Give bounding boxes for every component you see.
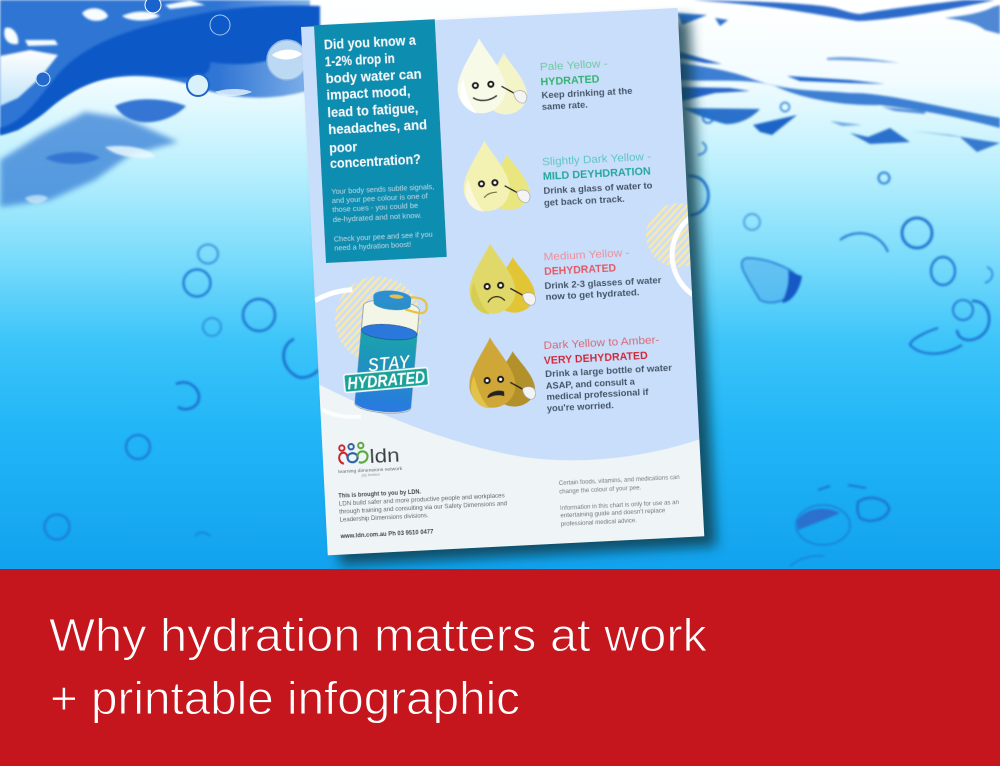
title text: + printable infographic	[50, 672, 520, 724]
heading: poor	[329, 138, 358, 156]
footer text: disclaimer: professional medical advice.	[561, 518, 637, 528]
row: slightly dark yellow: Drink a glass of water to	[543, 181, 653, 197]
footer background	[319, 365, 704, 555]
row: medium yellow: Drink 2-3 glasses of water	[544, 275, 662, 292]
paper	[301, 8, 704, 556]
row: pale yellow hydrated: same rate.	[542, 100, 588, 113]
sheet shadow	[313, 18, 716, 565]
row: pale yellow hydrated: Pale Yellow -	[540, 58, 608, 74]
row: dark yellow to amber: medical professional if	[546, 387, 649, 403]
row: medium yellow: Medium Yellow -	[543, 247, 630, 264]
title text: Why hydration matters at work	[49, 609, 708, 661]
bubbles	[44, 102, 992, 566]
row: slightly dark yellow: Slightly Dark Yellow -	[542, 151, 652, 169]
footer text: disclaimer: Information in this chart is only for use as an	[560, 500, 679, 512]
heading: lead to fatigue,	[327, 100, 419, 120]
footer text: about ldn: Leadership Dimensions divisions.	[340, 513, 429, 524]
bottle illustration	[338, 287, 437, 417]
row: medium yellow: DEHYDRATED	[544, 262, 616, 278]
body text: Your body sends subtle signals,	[331, 182, 434, 196]
label: stay hydrated	[342, 350, 429, 394]
row: slightly dark yellow	[461, 132, 654, 213]
footer text: about ldn: www.ldn.com.au Ph 03 9510 0477	[339, 530, 434, 540]
body text: de-hydrated and not know.	[333, 210, 422, 224]
decoration: white arc bottom	[320, 406, 361, 419]
footer text: about ldn: through training and consulting via our Safety Dimensions and	[339, 501, 507, 516]
row: medium yellow	[467, 235, 663, 315]
footer text: about ldn	[337, 485, 509, 540]
heading: body water can	[325, 65, 422, 86]
label: stay hydrated: STAY	[367, 352, 413, 377]
row: dark yellow to amber: Dark Yellow to Amber-	[543, 334, 660, 352]
icon: happy drops	[455, 36, 528, 117]
body text: and your pee colour is one of	[332, 191, 429, 205]
heading: 1-2% drop in	[324, 50, 395, 69]
footer text: disclaimer: Certain foods, vitamins, and medications can	[559, 475, 680, 487]
row: pale yellow hydrated	[455, 31, 633, 117]
footer text: disclaimer: entertaining guide and doesn't replace	[560, 508, 666, 520]
bottle handle	[405, 297, 427, 314]
heading: impact mood,	[326, 83, 411, 103]
title text	[49, 609, 708, 724]
logo: ldn: pty limited	[361, 472, 380, 477]
footer text: about ldn: This is brought to you by LDN.	[338, 490, 422, 500]
row: pale yellow hydrated: Keep drinking at the	[541, 86, 633, 101]
row: pale yellow hydrated: HYDRATED	[540, 74, 600, 89]
row: medium yellow: now to get hydrated.	[545, 287, 640, 303]
bottle liquid	[354, 330, 417, 414]
body text: Check your pee and see if you	[334, 230, 433, 244]
decoration: white arc top	[314, 290, 353, 301]
logo: ldn: ldn	[369, 445, 400, 468]
row: dark yellow to amber: VERY DEHYDRATED	[544, 350, 648, 367]
infographic sheet	[301, 8, 725, 569]
footer text: about ldn: LDN build safer and more productive people and workplaces	[339, 493, 505, 507]
icon: worried drops	[467, 335, 536, 409]
row: dark yellow to amber: you're worried.	[547, 400, 614, 415]
decoration: white ring right	[670, 216, 692, 297]
row: slightly dark yellow: get back on track.	[544, 194, 625, 209]
row: dark yellow to amber	[467, 328, 674, 419]
bottle body	[354, 298, 420, 415]
body text: need a hydration boost!	[334, 240, 411, 253]
title banner	[0, 569, 1000, 766]
row: dark yellow to amber: Drink a large bottle of water	[545, 363, 673, 380]
body text	[331, 182, 437, 253]
bottle lid	[372, 289, 412, 311]
heading	[324, 31, 429, 171]
logo: ldn	[337, 441, 403, 478]
decoration: hatched circle behind bottle	[334, 276, 421, 357]
water surface: left waves	[0, 0, 320, 207]
water surface: right waves	[677, 0, 1000, 152]
icon: unhappy drops	[467, 241, 536, 315]
row: dark yellow to amber: ASAP, and consult a	[546, 376, 636, 392]
footer text: disclaimer: change the colour of your pee.	[559, 485, 642, 495]
label: stay hydrated: HYDRATED	[347, 368, 426, 393]
row: slightly dark yellow: MILD DEYHDRATION	[543, 165, 651, 183]
panel: did you know	[314, 19, 447, 263]
decoration: hatched circle right	[646, 203, 690, 268]
logo: ldn: learning dimensions network	[338, 466, 403, 474]
footer text: disclaimer	[559, 475, 682, 528]
icon: sad drops	[461, 139, 531, 213]
heading: concentration?	[330, 151, 421, 171]
water background	[0, 0, 1000, 570]
body text: those cues - you could be	[332, 201, 418, 214]
heading: headaches, and	[328, 116, 427, 137]
heading: Did you know a	[324, 32, 416, 52]
